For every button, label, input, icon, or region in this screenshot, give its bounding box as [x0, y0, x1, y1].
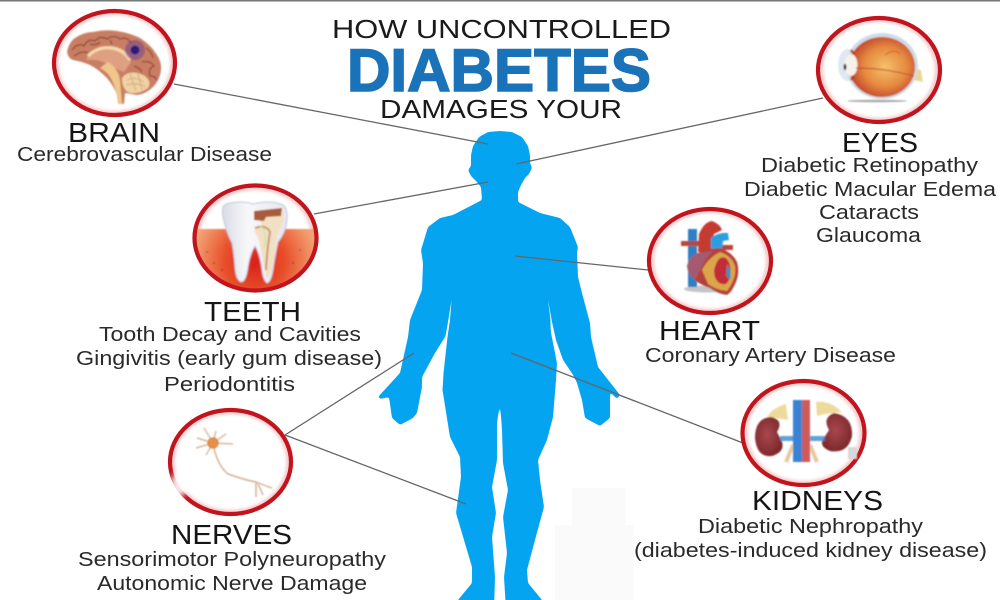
line: brain — [174, 84, 488, 144]
panel: eyes — [744, 18, 997, 247]
text: eyes conditions: Diabetic Retinopathy — [761, 154, 979, 177]
text: teeth conditions — [76, 323, 382, 396]
text: teeth conditions: Gingivitis (early gum disease) — [76, 347, 382, 370]
panel: brain — [17, 11, 272, 166]
text: teeth conditions: Periodontitis — [164, 373, 295, 396]
text: kidneys conditions: Diabetic Nephropathy — [698, 515, 924, 538]
heading: teeth: TEETH — [204, 296, 301, 327]
connector lines — [174, 84, 823, 504]
icon: neuron — [170, 410, 291, 514]
title line 3: DAMAGES YOUR — [380, 94, 622, 124]
text: kidneys conditions — [634, 515, 987, 562]
heading: heart: HEART — [659, 315, 760, 346]
panel: heart — [645, 209, 896, 367]
human body silhouette — [378, 131, 620, 600]
faint background patch — [555, 488, 634, 600]
line: eyes — [516, 98, 823, 164]
icon: kidneys — [742, 381, 864, 485]
heading: kidneys: KIDNEYS — [752, 485, 883, 516]
line: nerves to arm — [285, 353, 414, 435]
text: eyes conditions: Diabetic Macular Edema — [744, 178, 997, 201]
panel: nerves — [78, 410, 387, 595]
text: heart conditions: Coronary Artery Disease — [645, 344, 896, 367]
panel: kidneys — [634, 381, 987, 562]
text: eyes conditions: Cataracts — [819, 201, 919, 224]
heading: eyes: EYES — [842, 127, 918, 158]
text: eyes conditions: Glaucoma — [816, 224, 922, 247]
icon: heart — [649, 209, 771, 313]
panel: teeth — [76, 186, 382, 396]
line: nerves to leg — [285, 435, 466, 504]
heading: nerves: NERVES — [171, 519, 292, 550]
title — [332, 14, 671, 124]
text: nerves conditions — [78, 548, 387, 595]
icon: tooth — [194, 186, 317, 293]
text: kidneys conditions: (diabetes-induced kidney disease) — [634, 539, 987, 562]
text: eyes conditions — [744, 154, 997, 247]
title line 1: HOW UNCONTROLLED — [332, 14, 671, 44]
icon: brain — [54, 11, 175, 115]
text: brain conditions: Cerebrovascular Disease — [17, 143, 272, 166]
line: teeth — [314, 182, 488, 214]
text: nerves conditions: Sensorimotor Polyneuropathy — [78, 548, 387, 571]
line: heart — [515, 256, 648, 270]
text: nerves conditions: Autonomic Nerve Damage — [97, 572, 367, 595]
title line 2: DIABETES — [347, 37, 651, 104]
text: teeth conditions: Tooth Decay and Cavities — [99, 323, 361, 346]
line: kidneys — [511, 353, 743, 443]
heading: brain: BRAIN — [68, 117, 160, 148]
icon: eye — [818, 18, 940, 122]
